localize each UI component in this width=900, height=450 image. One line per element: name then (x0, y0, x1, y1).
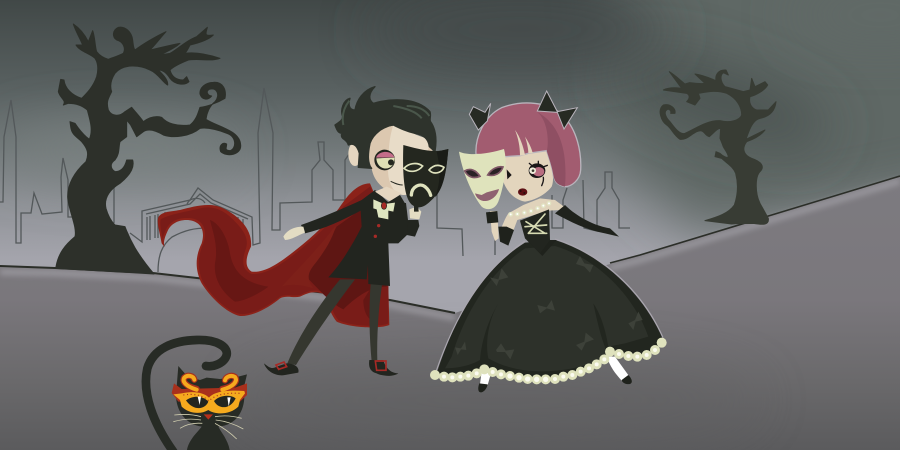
red flowing cape (158, 183, 389, 327)
black cat wearing orange carnival mask (146, 340, 247, 450)
man: vampire figure (158, 87, 448, 376)
tragedy mask, black (403, 145, 448, 212)
torso: skin, bodice, lacing and necklace (501, 198, 564, 253)
ball gown skirt with pearl hem (430, 239, 667, 384)
ground (0, 176, 900, 450)
legs and shoes (264, 279, 398, 376)
cat carnival mask (172, 376, 247, 413)
face details: eyes and lips (507, 161, 547, 196)
cat head and body (176, 366, 247, 450)
arms, hair, bows and comedy mask (459, 91, 619, 246)
woman: gothic doll in ball gown (430, 91, 667, 392)
cat nose and whiskers (173, 414, 243, 439)
city skyline outlines (0, 88, 630, 272)
black coat (283, 190, 418, 286)
cat tail (146, 340, 227, 450)
head, hair and face (335, 87, 436, 237)
small distant tree (660, 70, 776, 224)
large twisted tree (56, 24, 241, 274)
stockings and shoes (478, 357, 632, 392)
